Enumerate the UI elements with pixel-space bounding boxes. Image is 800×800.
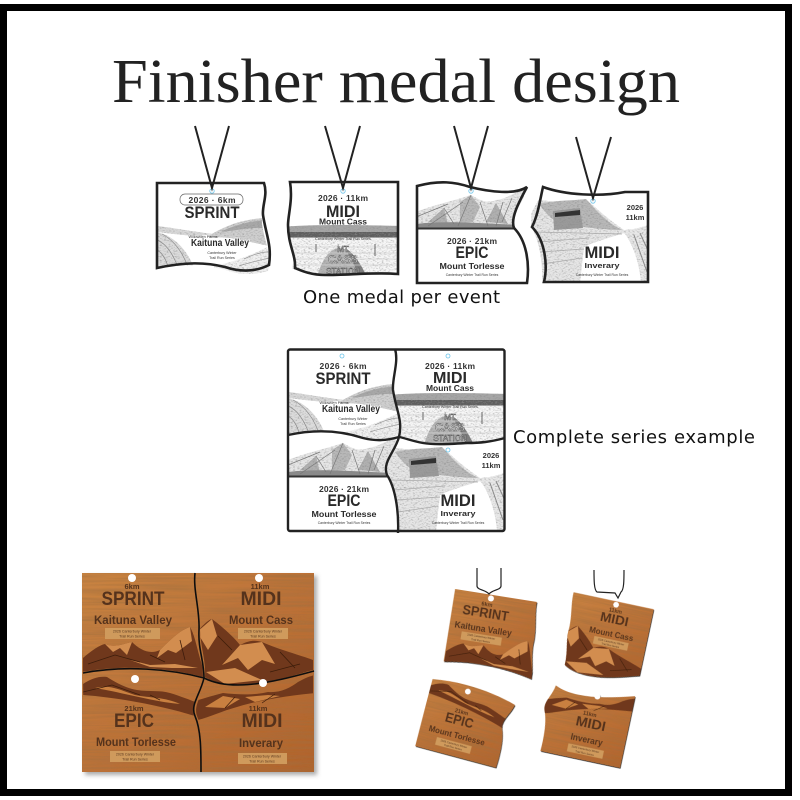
series text: Inverary: 2026 bbox=[483, 451, 499, 460]
wood text: Inverary: Inverary bbox=[239, 736, 283, 750]
title: Finisher medal design bbox=[112, 48, 680, 116]
series text: Mount Cass: STATION bbox=[433, 434, 467, 443]
medal: Epic Mount Torlesse bbox=[416, 182, 528, 283]
medal: Epic Mount Torlesse: Mount Torlesse bbox=[440, 262, 505, 271]
series text: Inverary: Inverary bbox=[440, 509, 476, 518]
wood medal: Epic hanging: EPIC bbox=[444, 709, 475, 731]
wood medal: Inverary hanging: 2026 Canterbury Winter bbox=[571, 744, 600, 754]
series text: Sprint bbox=[316, 361, 380, 426]
series text: Inverary: MIDI bbox=[440, 491, 476, 510]
wood medal: Epic hanging: Mount Torlesse bbox=[428, 723, 486, 748]
series text: Mount Cass: 2026 · 11km bbox=[425, 361, 475, 371]
wood text: Inverary: 2026 Canterbury Winter bbox=[243, 754, 282, 758]
wood medal set: assembled bbox=[82, 573, 315, 772]
medal: Midi Mount Cass: Canterbury Winter Trail Run Series bbox=[315, 237, 371, 241]
series text: Mount Cass: CASS bbox=[435, 422, 465, 434]
wood medal: Mount Cass hanging bbox=[553, 589, 658, 690]
wood text: Inverary: MIDI bbox=[242, 711, 282, 732]
wood text: Inverary: Trail Run Series bbox=[249, 760, 275, 764]
series text: Sprint: Trail Run Series bbox=[340, 422, 366, 426]
medal: Epic Mount Torlesse: Canterbury Winter Trail Run Series bbox=[446, 273, 499, 277]
ribbon: Midi Inverary bbox=[576, 137, 611, 198]
wood text: Sprint: 6km bbox=[124, 582, 140, 591]
series text: Inverary bbox=[432, 451, 501, 525]
medal: Midi Inverary: Inverary bbox=[584, 261, 620, 270]
series text: Mount Torlesse: Canterbury Winter Trail Run Series bbox=[318, 521, 371, 525]
series text: Inverary: Canterbury Winter Trail Run Series bbox=[432, 521, 485, 525]
series text: Sprint: SPRINT bbox=[316, 369, 371, 388]
wood text: Inverary: 11km bbox=[249, 704, 268, 713]
wood medal: Sprint hanging: Trail Run Series bbox=[471, 637, 491, 644]
medal: Sprint Kaituna Valley: 2026 · 6km bbox=[188, 195, 236, 205]
wood medal: Inverary hanging: Trail Run Series bbox=[575, 749, 595, 757]
medal: Midi Inverary bbox=[531, 187, 652, 283]
medal: Sprint Kaituna Valley bbox=[157, 183, 270, 274]
wood text: Mount Cass: Trail Run Series bbox=[250, 634, 276, 638]
series text: Sprint: Kaituna Valley bbox=[322, 403, 380, 415]
medal: Epic Mount Torlesse: 2026 · 21km bbox=[447, 236, 497, 246]
ribbon: Midi Mount Cass bbox=[325, 126, 360, 188]
wood medal: Mount Cass hanging: 2026 Canterbury Winter bbox=[598, 638, 625, 646]
medal: Midi Inverary: 2026 bbox=[627, 203, 643, 212]
medal: Sprint Kaituna Valley: Canterbury Winter bbox=[207, 251, 237, 255]
cord: Sprint bbox=[477, 568, 501, 594]
medal: Midi Mount Cass: STATION bbox=[326, 267, 360, 276]
series text: Mount Torlesse: Mount Torlesse bbox=[312, 510, 377, 519]
series text: Mount Cass bbox=[422, 361, 478, 443]
medal: Epic Mount Torlesse: EPIC bbox=[456, 243, 488, 262]
wood medal: Sprint hanging: Kaituna Valley bbox=[454, 619, 513, 638]
wood text: Mount Cass bbox=[229, 582, 293, 639]
series text: Sprint: Willowden Farms bbox=[319, 401, 349, 405]
medal: Midi Inverary: Canterbury Winter Trail Run Series bbox=[576, 273, 629, 277]
wood text: Inverary bbox=[238, 704, 287, 764]
medal: Midi Mount Cass: CASS bbox=[328, 254, 358, 266]
medal: Midi Mount Cass: MIDI bbox=[326, 202, 360, 221]
wood medal: Mount Cass hanging: MIDI bbox=[599, 609, 630, 629]
medal: Midi Inverary: 11km bbox=[626, 213, 645, 222]
series text: Mount Torlesse: EPIC bbox=[328, 491, 360, 510]
medal: Sprint Kaituna Valley: Willowden Farms bbox=[188, 235, 218, 239]
wood text: Mount Torlesse: 2026 Canterbury Winter bbox=[116, 752, 155, 756]
series text: Mount Cass: Canterbury Winter Trail Run Series bbox=[422, 405, 478, 409]
wood text: Mount Torlesse: EPIC bbox=[114, 711, 154, 732]
complete series diagram bbox=[288, 349, 508, 533]
wood medal: Sprint hanging: 2026 Canterbury Winter bbox=[467, 633, 496, 641]
series text: Inverary: 11km bbox=[482, 461, 501, 470]
wood text: Mount Torlesse: Mount Torlesse bbox=[96, 735, 176, 749]
wood medal: Inverary hanging: 11km bbox=[582, 711, 597, 719]
wood text: Mount Cass: MIDI bbox=[240, 589, 282, 610]
medal: Sprint Kaituna Valley: Kaituna Valley bbox=[191, 237, 249, 249]
series text: Mount Cass: Mount Cass bbox=[426, 384, 475, 393]
series text: Mount Torlesse bbox=[312, 484, 377, 525]
wood medal: Mount Cass hanging: Trail Run Series bbox=[601, 642, 620, 649]
wood medal: Sprint hanging: SPRINT bbox=[461, 601, 510, 624]
medal: Sprint Kaituna Valley: SPRINT bbox=[184, 203, 240, 222]
cord: Mount Cass bbox=[594, 570, 624, 598]
wood medal: Epic hanging: 21km bbox=[454, 708, 469, 717]
wood text: Sprint: Kaituna Valley bbox=[94, 613, 172, 627]
wood text: Mount Cass: 2026 Canterbury Winter bbox=[244, 630, 283, 634]
ribbon: Epic bbox=[454, 126, 488, 188]
wood medal: Inverary hanging: MIDI bbox=[574, 712, 607, 734]
wood text: Sprint: 2026 Canterbury Winter bbox=[113, 630, 152, 634]
series text: Mount Torlesse: 2026 · 21km bbox=[319, 484, 369, 494]
wood medal: Inverary hanging: Inverary bbox=[570, 731, 604, 748]
medal: Midi Mount Cass: 2026 · 11km bbox=[318, 193, 368, 203]
wood text: Mount Cass: 11km bbox=[251, 582, 270, 591]
wood medal: Epic hanging bbox=[412, 672, 521, 772]
wood text: Mount Torlesse bbox=[96, 704, 176, 762]
wood medal: Epic hanging: 2026 Canterbury Winter bbox=[440, 738, 468, 749]
wood medal: Epic hanging: Trail Run Series bbox=[444, 743, 463, 752]
wood medal: Sprint hanging bbox=[440, 586, 547, 682]
series text: Mount Cass: MT bbox=[444, 413, 456, 422]
wood medal: Mount Cass hanging: 11km bbox=[608, 607, 623, 616]
medal: Midi Mount Cass bbox=[283, 182, 401, 278]
medal: Midi Mount Cass: Mount Cass bbox=[319, 218, 368, 226]
medal: Sprint Kaituna Valley: Trail Run Series bbox=[209, 256, 235, 260]
wood text: Sprint bbox=[94, 582, 172, 639]
ribbon: Sprint bbox=[195, 126, 229, 188]
wood medal: Inverary hanging bbox=[530, 672, 640, 772]
series text: Mount Cass: MIDI bbox=[433, 370, 467, 387]
wood text: Sprint: Trail Run Series bbox=[119, 634, 145, 638]
wood text: Sprint: SPRINT bbox=[102, 589, 165, 610]
wood text: Mount Torlesse: 21km bbox=[124, 704, 144, 713]
wood medal: Mount Cass hanging: Mount Cass bbox=[588, 624, 635, 643]
series text: Sprint: 2026 · 6km bbox=[320, 361, 367, 371]
wood text: Mount Torlesse: Trail Run Series bbox=[122, 758, 148, 762]
caption: complete series example: Complete series example bbox=[513, 427, 755, 448]
series text: Sprint: Canterbury Winter bbox=[338, 417, 368, 421]
medal: Midi Mount Cass: MT bbox=[337, 245, 349, 254]
caption: one medal per event: One medal per event bbox=[303, 287, 500, 308]
wood medal: Sprint hanging: 6km bbox=[481, 601, 493, 609]
medal: Midi Inverary: MIDI bbox=[584, 243, 620, 262]
wood text: Mount Cass: Mount Cass bbox=[229, 613, 293, 627]
